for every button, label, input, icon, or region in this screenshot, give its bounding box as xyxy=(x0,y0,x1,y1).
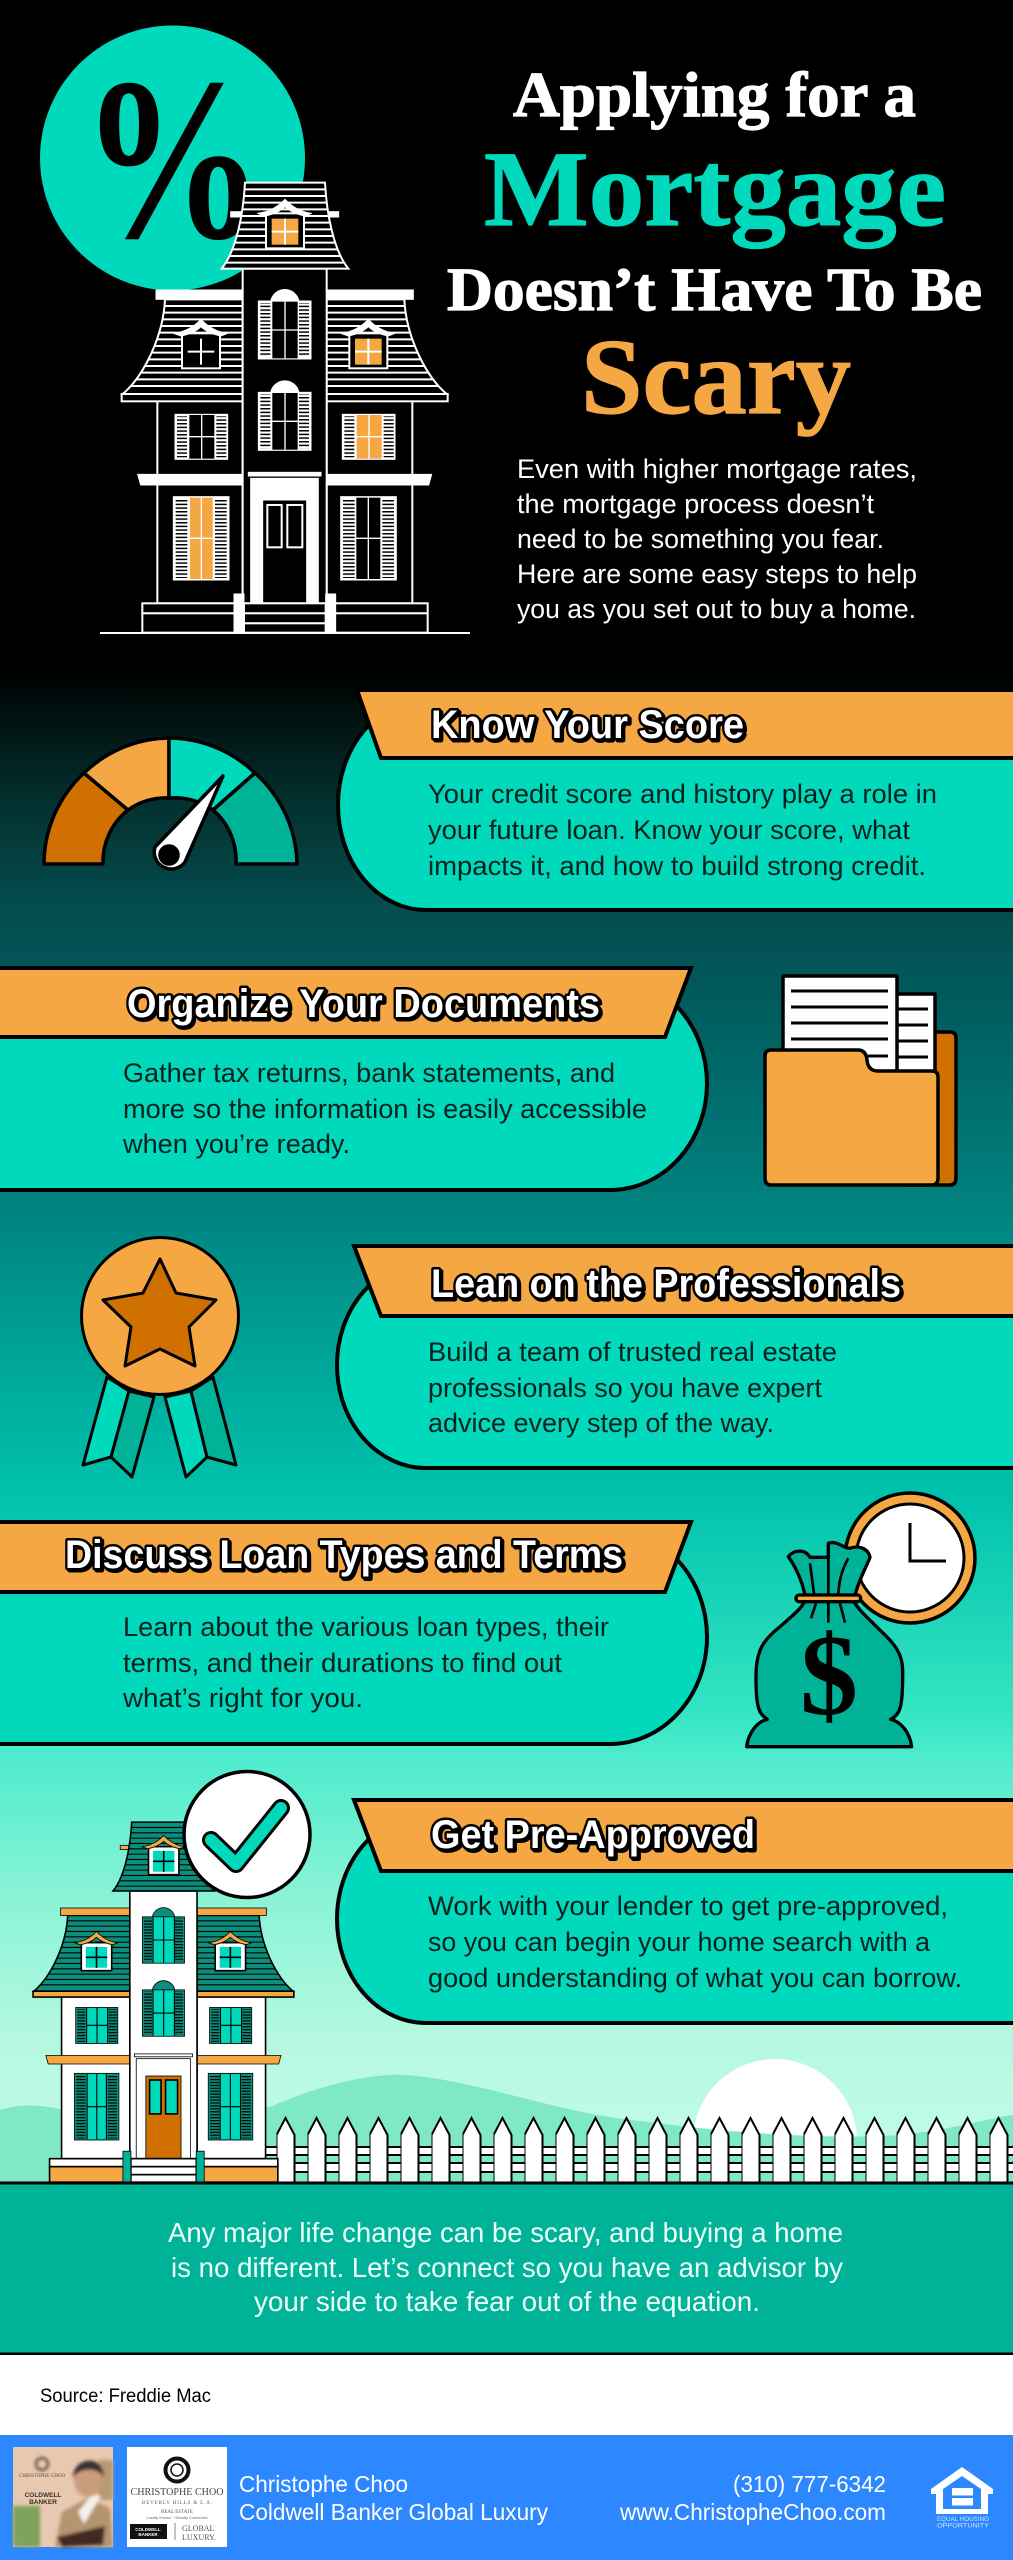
agent photo: COLDWELL xyxy=(25,2492,61,2499)
panel: know your score: Your credit score and history play a role in xyxy=(428,779,937,809)
icon: money bag and clock: $ xyxy=(800,1612,858,1740)
panel: get pre-approved: so you can begin your home search with a xyxy=(428,1927,931,1957)
agent logo: BANKER xyxy=(138,2532,158,2537)
icon: credit score gauge xyxy=(44,738,297,869)
icon: check mark circle xyxy=(184,1772,310,1898)
agent phone and website xyxy=(619,2471,886,2525)
panel: get pre-approved: Work with your lender to get pre-approved, xyxy=(428,1891,948,1921)
agent contact name: Christophe Choo xyxy=(239,2471,408,2497)
agent photo: CHRISTOPHE CHOO xyxy=(19,2474,65,2479)
panel: lean on the professionals: professionals so you have expert xyxy=(428,1373,822,1403)
panel: organize your documents: Organize Your Documents xyxy=(127,982,600,1026)
agent logo: CHRISTOPHE CHOO xyxy=(130,2487,224,2498)
intro text: Here are some easy steps to help xyxy=(517,559,917,589)
panel: closing message: is no different. Let’s connect so you have an advisor by xyxy=(171,2252,843,2283)
hills xyxy=(0,2075,1013,2183)
agent logo xyxy=(127,2447,227,2547)
panel: discuss loan types and terms: Discuss Loan Types and Terms xyxy=(65,1533,623,1577)
banner: organize your documents xyxy=(0,968,691,1037)
panel: get pre-approved: good understanding of what you can borrow. xyxy=(428,1963,962,1993)
agent logo: REAL ESTATE xyxy=(161,2510,193,2515)
banner: lean on the professionals xyxy=(354,1246,1013,1316)
panel: lean on the professionals: advice every step of the way. xyxy=(428,1408,774,1438)
intro text: you as you set out to buy a home. xyxy=(517,594,916,624)
source note: Source: Freddie Mac xyxy=(40,2386,211,2407)
agent logo: COLDWELL xyxy=(135,2527,161,2532)
panel: organize your documents: more so the information is easily accessible xyxy=(123,1094,647,1124)
intro text xyxy=(517,454,917,624)
panel: lean on the professionals xyxy=(337,1246,1013,1468)
panel: organize your documents: when you’re ready. xyxy=(122,1129,350,1159)
white source strip xyxy=(0,2355,1013,2435)
title: Scary xyxy=(581,318,851,437)
panel: get pre-approved xyxy=(337,1800,1013,2023)
panel: discuss loan types and terms: Learn about the various loan types, their xyxy=(123,1612,609,1642)
intro text: Even with higher mortgage rates, xyxy=(517,454,917,484)
agent photo xyxy=(13,2447,113,2547)
agent logo: GLOBAL xyxy=(182,2524,215,2533)
illustration: colored house xyxy=(16,1822,309,2182)
icon: percent circle: % xyxy=(81,31,265,288)
icon: award medal xyxy=(82,1238,238,1477)
panel: closing message: your side to take fear out of the equation. xyxy=(254,2286,760,2317)
agent logo: Locally Known · Globally Connected xyxy=(146,2516,208,2520)
title: Applying for a xyxy=(513,59,916,130)
title: Doesn’t Have To Be xyxy=(447,257,982,324)
panel: discuss loan types and terms xyxy=(0,1522,707,1744)
panel: organize your documents: Gather tax returns, bank statements, and xyxy=(123,1058,615,1088)
agent logo: BEVERLY HILLS & L.A. xyxy=(142,2501,212,2506)
icon: money bag and clock xyxy=(747,1493,975,1747)
sun xyxy=(693,2059,857,2223)
agent phone and website: www.ChristopheChoo.com xyxy=(619,2499,886,2525)
panel: know your score: your future loan. Know your score, what xyxy=(428,815,910,845)
agent photo: BANKER xyxy=(29,2499,57,2506)
panel: lean on the professionals: Lean on the Professionals xyxy=(431,1262,901,1306)
panel: know your score: Know Your Score xyxy=(431,703,744,747)
panel: get pre-approved: Get Pre-Approved xyxy=(431,1813,755,1857)
icon: equal housing opportunity xyxy=(931,2467,993,2530)
agent phone and website: (310) 777-6342 xyxy=(733,2471,886,2497)
panel: lean on the professionals: Build a team of trusted real estate xyxy=(428,1337,837,1367)
title xyxy=(447,59,982,437)
footer bar xyxy=(0,2435,1013,2560)
banner: get pre-approved xyxy=(354,1800,1013,1871)
intro text: the mortgage process doesn’t xyxy=(517,489,874,519)
illustration: dark house xyxy=(100,183,470,634)
agent contact name: Coldwell Banker Global Luxury xyxy=(239,2499,548,2525)
agent logo: LUXURY. xyxy=(182,2533,216,2542)
panel: know your score xyxy=(338,690,1013,910)
icon: document folder xyxy=(765,976,956,1185)
panel: know your score: impacts it, and how to build strong credit. xyxy=(428,851,926,881)
panel: organize your documents xyxy=(0,968,707,1190)
title: Mortgage xyxy=(484,131,946,249)
panel: closing message: Any major life change can be scary, and buying a home xyxy=(168,2217,843,2248)
banner: know your score xyxy=(357,690,1013,758)
illustration: picket fence xyxy=(262,2116,1013,2184)
agent contact name xyxy=(239,2471,548,2525)
banner: discuss loan types xyxy=(0,1522,691,1592)
panel: discuss loan types and terms: terms, and their durations to find out xyxy=(123,1648,562,1678)
icon: equal housing opportunity: EQUAL HOUSING xyxy=(937,2516,989,2523)
panel: closing message xyxy=(0,2183,1013,2354)
icon: equal housing opportunity: OPPORTUNITY xyxy=(937,2522,990,2530)
intro text: need to be something you fear. xyxy=(517,524,884,554)
panel: discuss loan types and terms: what’s right for you. xyxy=(122,1683,363,1713)
